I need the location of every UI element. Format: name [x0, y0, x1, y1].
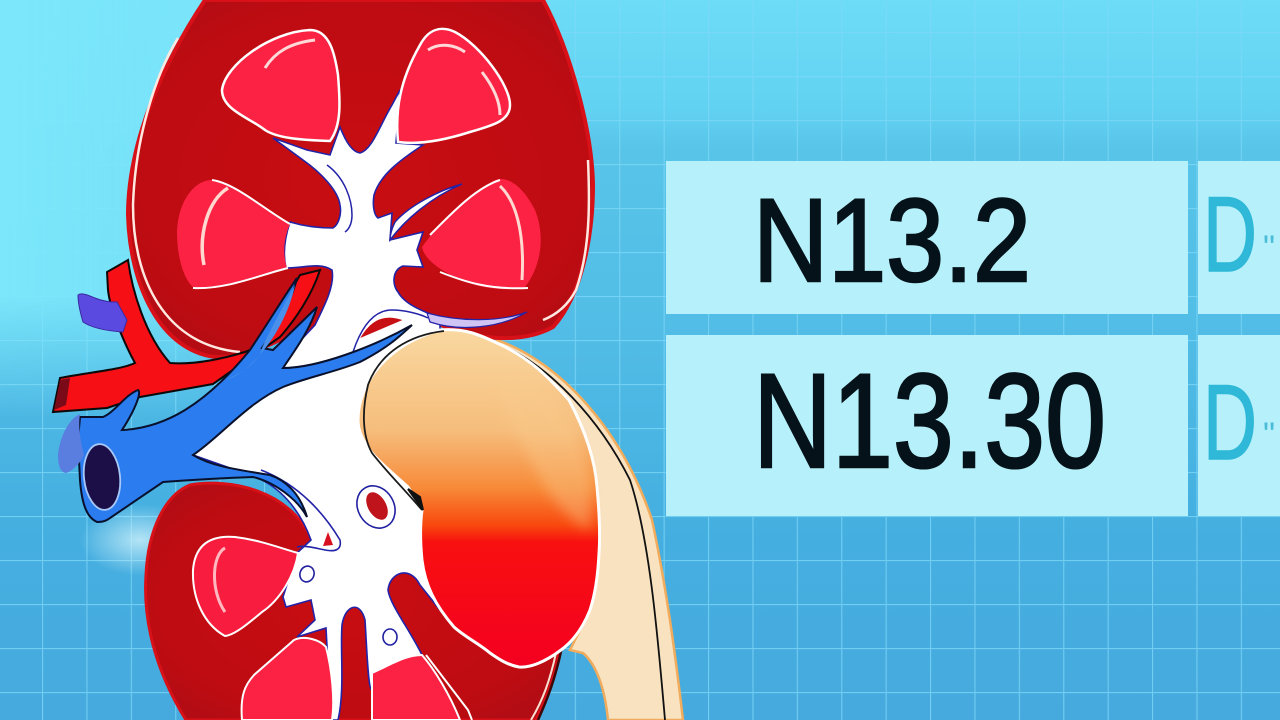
- row: N13.30 description cell: ": [1263, 416, 1275, 454]
- inner curved vessel: [327, 165, 352, 232]
- red column with outline: [390, 184, 462, 240]
- renal pyramid: mid left: [177, 180, 290, 289]
- tongue outline: [261, 470, 340, 551]
- ureter tube: [497, 340, 683, 720]
- vein blue: [58, 278, 412, 522]
- renal pyramid: bottom right: [372, 655, 460, 720]
- row: N13.2 description cell: D: [1203, 174, 1257, 294]
- kidney upper lobe highlight lines: [133, 38, 589, 352]
- row: N13.30 description cell: [1198, 335, 1280, 516]
- wedge outline: [353, 310, 428, 352]
- small vessels: [298, 532, 397, 645]
- kidney illustration: [53, 0, 683, 720]
- small calyx: [349, 479, 403, 535]
- upper lobe sliver: [427, 312, 527, 327]
- row: N13.30 code cell: [666, 335, 1188, 516]
- vein stub purple: [78, 294, 127, 332]
- renal pyramid: mid right: [422, 179, 541, 289]
- vein flap highlight: [225, 285, 295, 380]
- pyramid gloss top: [265, 40, 500, 115]
- row: N13.30 description cell: D: [1203, 362, 1257, 482]
- row: N13.2 code cell: [666, 161, 1188, 314]
- kidney upper lobe: [128, 0, 593, 357]
- renal pyramid: lower left: [193, 537, 298, 636]
- renal pelvis white: [193, 90, 500, 720]
- row: N13.30 code cell: N13.30: [753, 347, 1106, 496]
- vein opening: [81, 442, 123, 512]
- renal pyramid: top right: [397, 29, 510, 143]
- bulge hydronephrosis: [358, 330, 600, 667]
- renal pyramid: top left: [222, 30, 340, 141]
- row: N13.2 description cell: ": [1263, 229, 1275, 267]
- row: N13.2 code cell: N13.2: [753, 175, 1031, 307]
- artery opening: [54, 378, 70, 410]
- vein shadow: [58, 414, 84, 473]
- table of codes: [666, 161, 1280, 516]
- small red wedge: [358, 317, 405, 340]
- renal pyramid: bottom left: [242, 638, 333, 720]
- kidney lower lobe: [146, 483, 561, 720]
- artery red: [53, 260, 320, 412]
